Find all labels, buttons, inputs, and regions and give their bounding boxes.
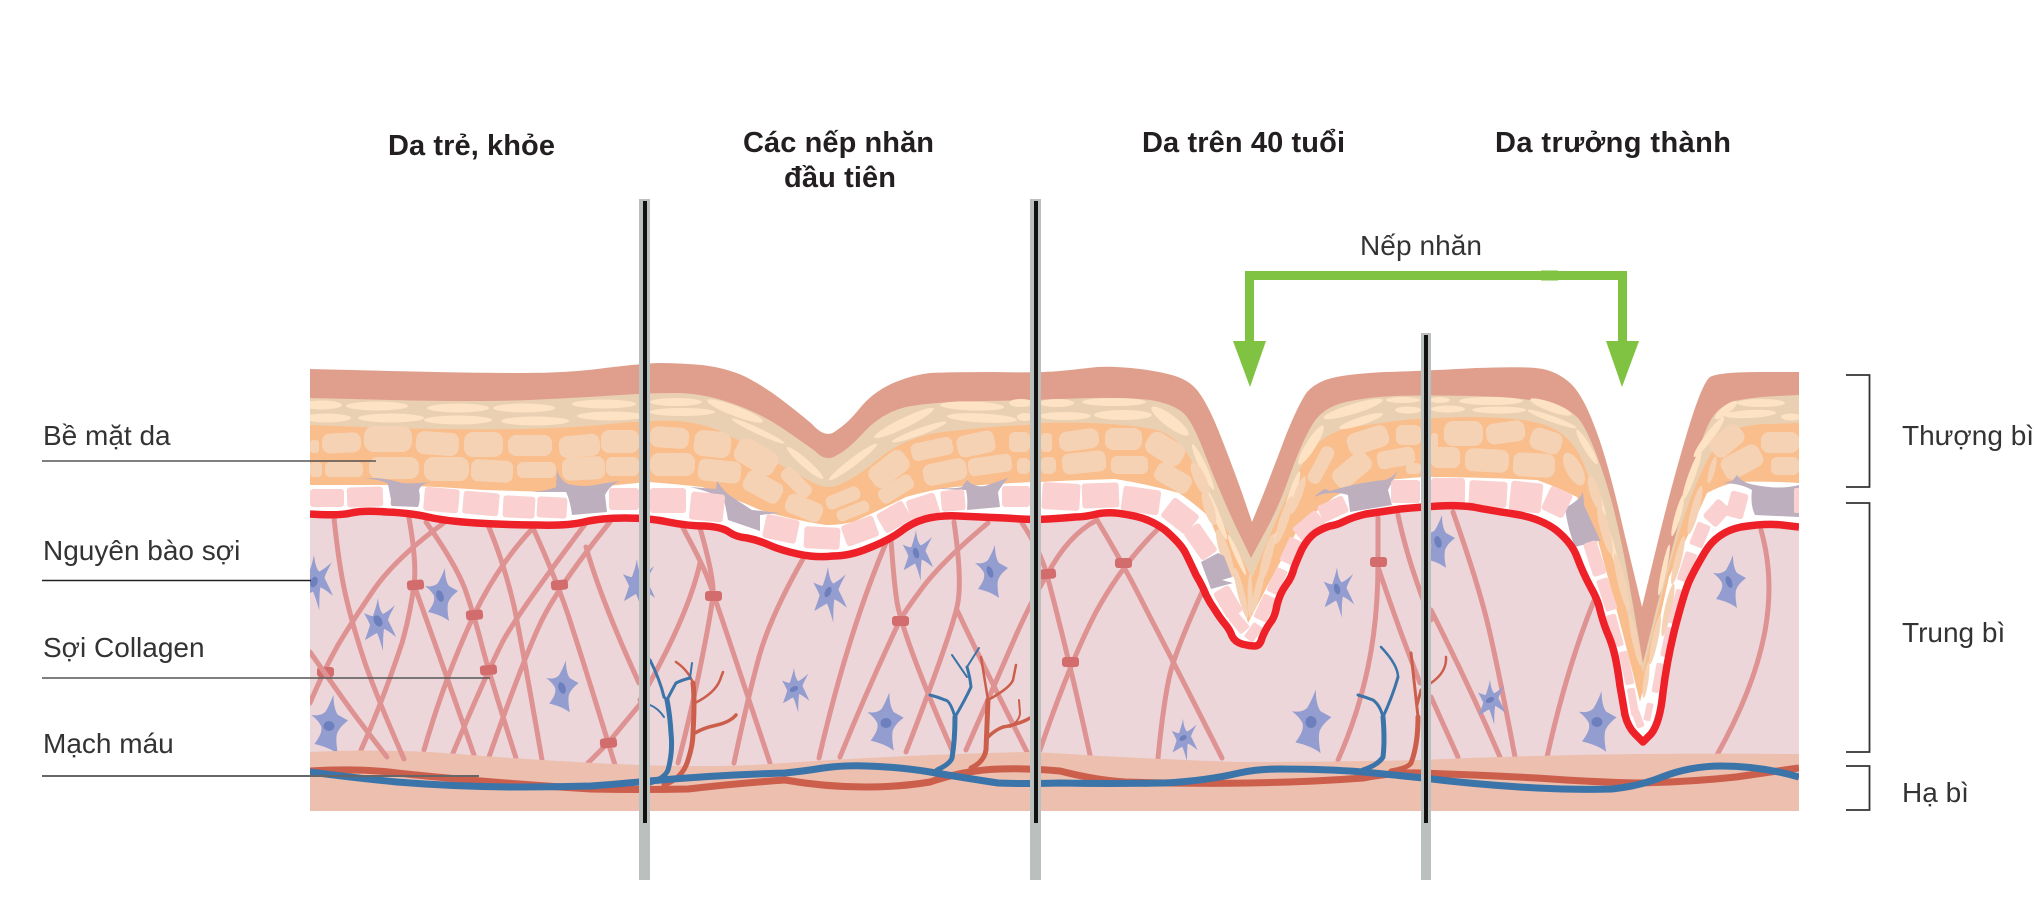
bracket: Thượng bì: Thượng bì <box>1902 420 2034 451</box>
spinous cells <box>310 419 1799 698</box>
stratum corneum layer <box>310 363 1799 663</box>
dermis background <box>310 509 1799 766</box>
collagen fibres <box>310 512 1769 765</box>
white basal band <box>310 477 1799 737</box>
fibroblasts <box>299 515 1746 761</box>
bracket: Hạ bì: Hạ bì <box>1902 777 1969 808</box>
label: Bề mặt da: Bề mặt da <box>43 420 171 451</box>
heading: Da trẻ, khỏe: Da trẻ, khỏe <box>388 130 555 162</box>
label: Mạch máu: Mạch máu <box>43 728 174 759</box>
heading: Các nếp nhăn đầu tiên: Các nếp nhăn <box>743 127 934 159</box>
main vein <box>310 766 1799 789</box>
hypodermis <box>310 751 1799 811</box>
granular layer <box>310 393 1799 672</box>
bracket: Trung bì <box>1846 503 2005 752</box>
bracket: Trung bì: Trung bì <box>1902 617 2005 648</box>
bracket: Hạ bì <box>1846 766 1969 810</box>
basement membrane (red line) <box>310 506 1799 742</box>
hanging collagen fibre ends <box>310 518 404 759</box>
label: Nguyên bào sợi: Nguyên bào sợi <box>43 535 240 566</box>
label: Sợi Collagen: Sợi Collagen <box>43 632 205 663</box>
bracket: Thượng bì <box>1846 375 2034 487</box>
divider bar 3 <box>1421 333 1431 880</box>
main artery <box>310 768 1799 790</box>
venule branches <box>650 647 1398 783</box>
spinous layer <box>310 417 1799 702</box>
label: Nếp nhăn: Nếp nhăn <box>1360 230 1482 261</box>
melanocytes (grey cells) <box>362 470 1799 589</box>
heading: Các nếp nhăn đầu tiên <box>743 127 934 194</box>
collagen cross-links <box>317 557 1387 749</box>
heading: Da trưởng thành: Da trưởng thành <box>1495 127 1731 159</box>
flattened keratin cells <box>302 395 1801 596</box>
fibroblast nuclei <box>309 535 1734 742</box>
green arrows pointing to wrinkles <box>1233 270 1639 387</box>
divider bar 2 <box>1030 199 1041 880</box>
arteriole branches <box>664 653 1446 785</box>
divider bar 1 <box>639 199 650 880</box>
heading: Da trên 40 tuổi: Da trên 40 tuổi <box>1142 127 1345 159</box>
basal keratinocytes (pink cells) <box>310 478 1802 729</box>
heading: Các nếp nhăn đầu tiên: đầu tiên <box>784 162 896 194</box>
skin cross-section illustration <box>299 363 1802 811</box>
